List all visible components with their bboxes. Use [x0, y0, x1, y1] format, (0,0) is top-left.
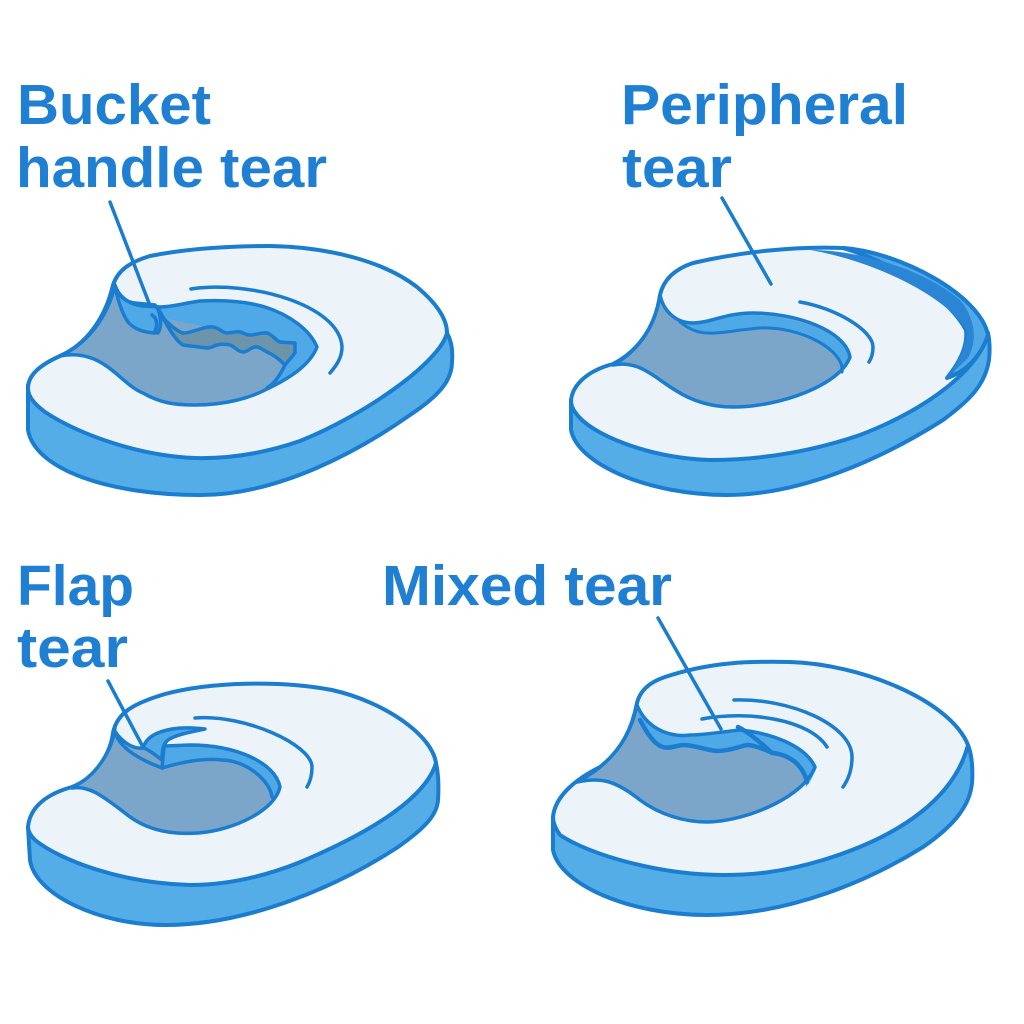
heading: flap tear: Flap	[17, 554, 134, 618]
swoosh lines	[702, 700, 852, 787]
meniscus illustration: flap	[28, 681, 438, 925]
heading: mixed tear: Mixed tear	[382, 554, 672, 618]
meniscus illustration: mixed	[553, 618, 972, 915]
meniscus illustration: bucket handle	[28, 202, 452, 495]
swoosh lines	[191, 287, 342, 373]
meniscus illustration: peripheral	[571, 198, 990, 495]
panel: mixed tear	[382, 554, 972, 915]
leader line	[110, 202, 149, 303]
flap	[115, 732, 164, 768]
leader line	[658, 618, 721, 729]
panel: flap tear	[17, 554, 438, 925]
heading: flap tear: tear	[17, 616, 128, 680]
heading: peripheral tear: Peripheral	[621, 73, 908, 137]
leader line	[108, 681, 143, 747]
swoosh lines	[195, 718, 312, 787]
panel: peripheral tear	[571, 73, 990, 495]
heading: bucket handle tear	[16, 73, 327, 200]
swoosh lines	[800, 302, 873, 362]
heading: peripheral tear	[621, 73, 908, 200]
heading: peripheral tear: tear	[622, 136, 732, 200]
panel: bucket handle tear	[16, 73, 452, 495]
peripheral tear crescent	[810, 248, 988, 378]
heading: bucket handle tear: handle tear	[16, 136, 327, 200]
heading: bucket handle tear: Bucket	[17, 73, 211, 137]
heading: flap tear	[17, 554, 134, 680]
torn strip	[163, 318, 295, 365]
leader line	[722, 198, 771, 284]
